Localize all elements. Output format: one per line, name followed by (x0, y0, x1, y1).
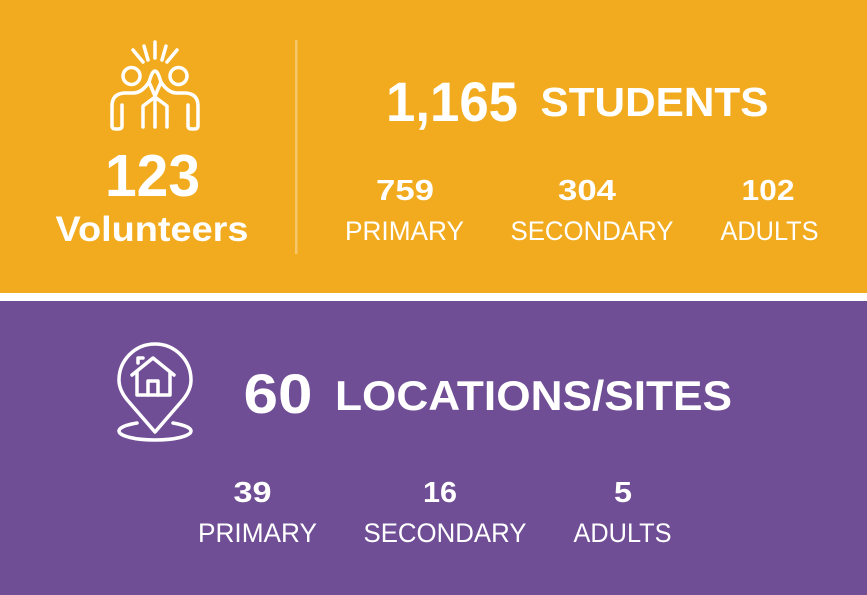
stat: volunteers label: Volunteers (56, 210, 248, 249)
stat: secondary students: 304 (558, 175, 616, 207)
stat: adult locations: ADULTS (574, 518, 672, 548)
stat: locations total: LOCATIONS/SITES (335, 372, 732, 419)
panel: locations (0, 301, 867, 595)
stat: primary students: 759 (376, 175, 434, 207)
icon: location pin with house (119, 344, 191, 440)
stat: adult locations: 5 (614, 477, 632, 509)
stat: adult students (720, 175, 818, 246)
stat: locations total: 60 (244, 362, 312, 425)
stat: secondary students: SECONDARY (510, 216, 674, 246)
stat: students total (386, 70, 768, 133)
stat: primary locations: 39 (234, 477, 272, 509)
stat: adult students: 102 (742, 175, 794, 207)
stat: secondary locations: 16 (423, 477, 457, 509)
stat: primary students (345, 175, 464, 246)
stat: secondary students (510, 175, 674, 246)
stat: adult students: ADULTS (720, 216, 818, 246)
icon: high five (112, 42, 198, 129)
stat: adult locations (574, 477, 672, 548)
stat: volunteers count: 123 (105, 143, 200, 209)
stat: secondary locations: SECONDARY (364, 518, 526, 548)
stat: primary students: PRIMARY (345, 216, 464, 246)
stat: locations total (244, 362, 732, 425)
stat: primary locations: PRIMARY (198, 518, 317, 548)
stat: primary locations (198, 477, 317, 548)
stat: secondary locations (364, 477, 526, 548)
stat: students total: STUDENTS (540, 79, 768, 125)
stat: students total: 1,165 (386, 70, 518, 133)
panel: volunteers and students (0, 0, 867, 293)
